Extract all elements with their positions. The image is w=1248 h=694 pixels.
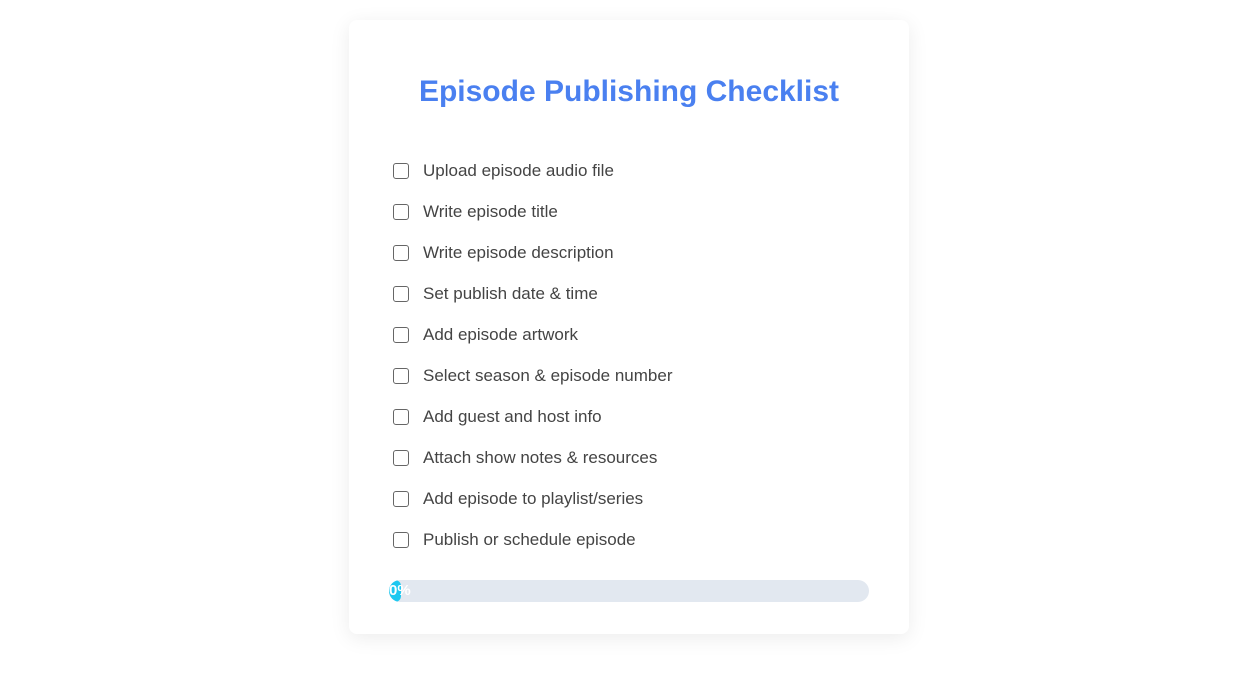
item 10: Publish or schedule episode [423,530,636,549]
item 8: Attach show notes & resources [423,448,657,467]
item 9: Add episode to playlist/series [423,489,643,508]
item 3: Write episode description [423,243,614,262]
progress bar: 0% [389,582,411,599]
item 2: Write episode title [423,202,558,221]
item 6: Select season & episode number [423,366,672,385]
item 7: Add guest and host info [423,407,602,426]
item 5: Add episode artwork [423,325,578,344]
item 1: Upload episode audio file [423,161,614,180]
card [349,20,909,634]
title: Episode Publishing Checklist [419,75,839,108]
progress bar [389,580,869,602]
item 4: Set publish date & time [423,284,598,303]
